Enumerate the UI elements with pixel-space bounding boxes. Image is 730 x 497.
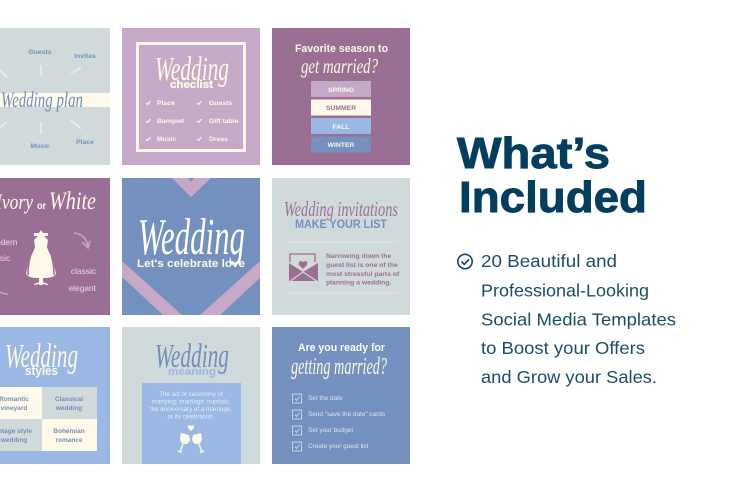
panel: wedding celebrate: [122, 178, 260, 315]
text: left list: elegant: [69, 283, 97, 293]
labels: plan items: Music: [30, 143, 50, 150]
checklist items: Place: [157, 100, 175, 107]
title: what's included: [457, 129, 647, 222]
icon: curved arrow: [74, 233, 90, 248]
body text: [326, 253, 400, 286]
body text: most stressful parts of: [326, 271, 400, 278]
labels: plan items: [28, 49, 96, 150]
description text: [481, 251, 676, 387]
description text: 20 Beautiful and: [481, 251, 617, 271]
heading: checklist: checlist: [170, 79, 213, 91]
title: what's included: What’s: [457, 129, 610, 178]
heading: wedding script: Wedding: [155, 338, 229, 375]
panel: wedding checklist: [122, 28, 260, 165]
text: left list: [0, 237, 97, 293]
checklist items: Music: [157, 136, 176, 143]
heading: ivory or white: [0, 188, 96, 215]
checklist text: Set the date: [308, 395, 343, 402]
panel: ready checklist: [272, 327, 410, 464]
icon: envelope: [289, 254, 318, 282]
description text: Social Media Templates: [481, 310, 676, 330]
checklist items: Gift table: [209, 118, 239, 125]
definition text: [150, 391, 232, 420]
styles grid: wedding: [0, 437, 27, 444]
body text: planning a wedding.: [326, 280, 391, 286]
season bars: FALL: [332, 124, 350, 131]
styles grid: romance: [55, 437, 83, 444]
description text: and Grow your Sales.: [481, 367, 657, 387]
checklist items: Dress: [209, 136, 228, 143]
heading: ivory or white: or: [37, 201, 46, 212]
heading: wedding script: Wedding: [138, 209, 245, 266]
checklist items: Banquet: [157, 118, 185, 125]
panel: wedding invitations: [272, 178, 410, 315]
description text: to Boost your Offers: [481, 338, 645, 358]
subheading: styles: styles: [25, 363, 58, 378]
definition text: or its celebration.: [167, 414, 215, 420]
panel: ivory or white: [0, 178, 110, 315]
definition text: The act or ceremony of: [159, 391, 223, 398]
icon: dress: [26, 230, 56, 285]
styles grid: vineyard: [1, 405, 27, 412]
season bars: SPRING: [328, 87, 354, 94]
panel: wedding plan: [0, 28, 110, 165]
heading: wedding script: Wedding: [155, 51, 229, 88]
heading: are you ready: Are you ready for: [298, 342, 386, 354]
checklist items: [146, 100, 239, 143]
panel: wedding styles: [0, 327, 110, 464]
dress sleeve lines: [28, 254, 54, 275]
styles grid: wedding: [55, 405, 82, 412]
panel: favorite season: [272, 28, 410, 165]
heading: wedding plan: Wedding plan: [1, 87, 83, 112]
labels: plan items: Invites: [74, 53, 96, 60]
icon: partial arrow: [0, 292, 8, 294]
heading: invitations script: Wedding invitations: [284, 197, 398, 221]
checklist items: Guests: [209, 100, 232, 107]
heading: favorite season: Favorite season to: [295, 43, 388, 55]
definition text: marrying; marriage; nuptials,: [152, 398, 230, 406]
styles grid: Classical: [55, 396, 83, 403]
script: getting married: getting married?: [291, 354, 387, 380]
styles grid: Bohemian: [53, 428, 85, 435]
script: get married: get married?: [301, 54, 378, 78]
season bars: WINTER: [328, 142, 354, 149]
styles grid: Romantic: [0, 396, 29, 403]
arrows: plan spokes: [0, 65, 81, 134]
checklist: [292, 394, 302, 451]
body text: Narrowing down the: [326, 253, 392, 260]
checklist text: [308, 395, 385, 450]
subheading: meaning: meaning: [168, 366, 216, 378]
checklist text: Create your guest list: [308, 443, 369, 450]
body text: guest list is one of the: [326, 262, 398, 269]
definition text: the anniversary of a marriage,: [150, 406, 232, 413]
title: what's included: Included: [459, 173, 647, 222]
styles grid: [0, 387, 97, 451]
checklist text: Send "save the date" cards: [308, 411, 385, 418]
heart strips: [122, 178, 260, 315]
subheading: make your list: MAKE YOUR LIST: [295, 217, 388, 231]
checklist text: Set your budget: [308, 427, 353, 434]
heading: ivory or white: White: [49, 188, 96, 215]
description text: Professional-Looking: [481, 280, 649, 300]
season bars: [311, 81, 371, 152]
season bars: SUMMER: [326, 105, 356, 112]
heading: wedding script: Wedding: [5, 338, 78, 375]
icon: check circle: [458, 254, 472, 269]
labels: plan items: Place: [76, 139, 94, 146]
panel: wedding meaning: [122, 327, 260, 464]
labels: plan items: Guests: [28, 49, 52, 56]
icon: toasting glasses: [178, 425, 204, 452]
definition box: [142, 383, 241, 464]
subheading: Let's celebrate love: [137, 258, 245, 270]
text: right list: classic: [71, 266, 96, 276]
